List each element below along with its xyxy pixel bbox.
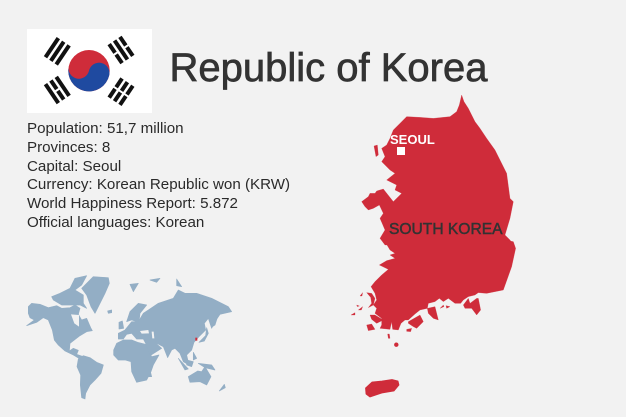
Japan xyxy=(199,328,208,342)
flag emblem: taegeuk xyxy=(68,50,110,91)
flag trigram: lower right xyxy=(108,77,134,106)
southern islands xyxy=(407,298,481,332)
Greenland xyxy=(82,277,109,313)
Madagascar xyxy=(148,370,152,377)
title: Republic of Korea xyxy=(170,46,488,90)
Southeast Asia islands xyxy=(178,352,215,370)
capital marker xyxy=(397,147,405,155)
world map xyxy=(27,276,232,399)
Arctic islands xyxy=(130,278,182,292)
country facts text block: Capital: Seoul xyxy=(27,158,121,175)
map of South Korea xyxy=(351,95,516,397)
Scandinavia xyxy=(127,303,147,322)
Britain xyxy=(119,321,124,329)
New Zealand xyxy=(219,384,225,391)
Black Sea and Caspian xyxy=(140,330,154,338)
Arctic Canada xyxy=(52,276,87,308)
country facts text block: Currency: Korean Republic won (KRW) xyxy=(27,176,290,193)
flag trigram: lower left xyxy=(44,76,71,104)
country facts text block: Provinces: 8 xyxy=(27,139,110,156)
mainland south xyxy=(371,240,516,330)
Jeju island xyxy=(366,380,399,397)
South Korea marker xyxy=(195,338,197,341)
capital label: SEOUL: SEOUL xyxy=(390,132,435,147)
Ganghwa island xyxy=(374,145,378,157)
North America xyxy=(27,303,92,359)
country facts text block: Population: 51,7 million xyxy=(27,120,184,137)
South America xyxy=(77,356,103,399)
southern islet xyxy=(394,343,398,347)
southwest islands xyxy=(351,293,390,338)
country facts text block: World Happiness Report: 5.872 xyxy=(27,195,238,212)
Australia xyxy=(188,367,211,385)
flag of South Korea xyxy=(27,29,152,113)
country facts text block: Official languages: Korean xyxy=(27,214,204,231)
country facts text block xyxy=(27,120,290,231)
Hudson Bay xyxy=(71,314,79,327)
flag trigram: upper left xyxy=(44,37,71,66)
mainland north xyxy=(362,95,513,245)
Eurasia xyxy=(118,290,232,365)
flag trigram: upper right xyxy=(108,36,134,64)
Iceland xyxy=(108,310,112,313)
Africa xyxy=(114,340,159,382)
Sakhalin xyxy=(212,318,217,327)
country label: SOUTH KOREA: SOUTH KOREA xyxy=(389,221,503,238)
